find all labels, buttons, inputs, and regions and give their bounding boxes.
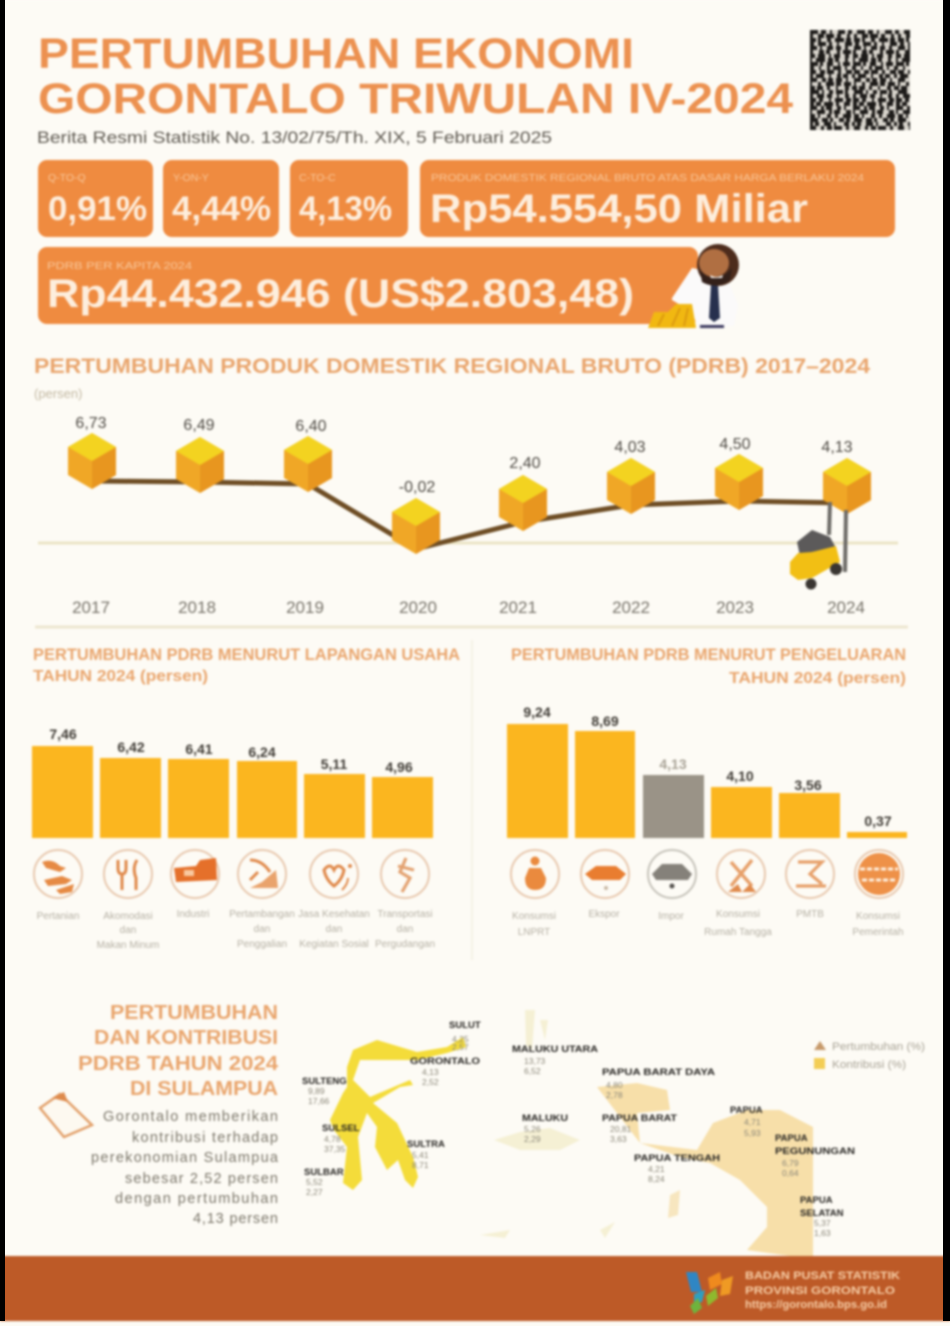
map labels: Maluku and Papua: 6,79 (782, 1158, 799, 1168)
icon: pertambangan (238, 850, 286, 898)
heading: growth by expenditure (511, 646, 906, 687)
icon: jasa lainnya (381, 850, 429, 898)
heading: growth by expenditure: TAHUN 2024 (persen) (729, 670, 906, 687)
line chart: PDRB growth 2017-2024: 4,50 (719, 436, 751, 453)
icon labels: industry: Industri (177, 909, 209, 920)
stat card: PDRB per kapita (38, 247, 698, 324)
heading: Sulampua: DI SULAMPUA (130, 1078, 278, 1100)
map labels: Maluku and Papua: SELATAN (800, 1208, 844, 1219)
text: Sulampua summary: kontribusi terhadap (132, 1130, 278, 1146)
icon labels: industry: Kegiatan Sosial (299, 939, 369, 950)
icon: ekspor (581, 850, 629, 898)
map labels: Maluku and Papua: 13,73 (524, 1056, 546, 1066)
icon labels: industry: dan (120, 925, 136, 936)
icon: pertanian (34, 850, 82, 898)
line chart: PDRB growth 2017-2024: 2022 (612, 598, 650, 617)
map labels: Maluku and Papua: 20,81 (610, 1124, 632, 1134)
text: Sulampua summary: 4,13 persen (193, 1211, 278, 1227)
heading: growth by expenditure: PERTUMBUHAN PDRB MENURUT PENGELUARAN (511, 646, 906, 664)
map labels: Sulawesi: 4,13 (422, 1067, 439, 1077)
icon labels: expenditure: PMTB (796, 909, 824, 920)
heading: Sulampua: PDRB TAHUN 2024 (78, 1053, 279, 1075)
map labels: Sulawesi: 9,89 (308, 1086, 325, 1096)
map labels: Maluku and Papua: 5,26 (524, 1124, 541, 1134)
icon labels: expenditure: Rumah Tangga (704, 927, 772, 938)
line chart: PDRB growth 2017-2024: 2018 (178, 598, 216, 617)
map labels: Sulawesi: 2,52 (422, 1077, 439, 1087)
map labels: Sulawesi: 5,41 (412, 1150, 429, 1160)
stat card: Y-on-Y: Y-ON-Y (173, 172, 209, 184)
map labels: Sulawesi: 4,78 (324, 1134, 341, 1144)
title (38, 30, 793, 123)
footer text: https://gorontalo.bps.go.id (745, 1299, 887, 1311)
icon labels: expenditure: Pemerintah (852, 927, 904, 938)
icon: forklift (790, 502, 846, 590)
map labels: Sulawesi: SULBAR (304, 1167, 344, 1178)
map labels: Sulawesi (302, 1020, 481, 1197)
icon labels: industry: Akomodasi (103, 911, 153, 922)
bar chart: industry: 6,41 (185, 741, 213, 757)
icon labels: expenditure: LNPRT (518, 927, 550, 938)
bar chart: expenditure: 8,69 (591, 713, 619, 729)
bar chart: industry: 4,96 (385, 759, 413, 775)
line chart: PDRB growth 2017-2024: 2023 (716, 598, 754, 617)
bar chart: industry: 5,11 (321, 756, 347, 772)
map labels: Sulawesi: 2,27 (306, 1187, 323, 1197)
line chart: PDRB growth 2017-2024: 2020 (399, 598, 437, 617)
line chart: PDRB growth 2017-2024: 6,73 (75, 415, 107, 432)
footer text: PROVINSI GORONTALO (745, 1285, 896, 1297)
icon labels: expenditure: Konsumsi (856, 911, 900, 922)
icon: jasa kesehatan (310, 850, 358, 898)
stat card: PDRB: Rp54.554,50 Miliar (430, 187, 808, 231)
map labels: Maluku and Papua: PAPUA (800, 1195, 833, 1206)
map labels: Maluku and Papua: 1,63 (814, 1228, 831, 1238)
icon labels: industry: Makan Minum (97, 940, 159, 951)
map labels: Maluku and Papua: PAPUA BARAT (602, 1113, 677, 1124)
stat card: Q-to-Q: Q-TO-Q (48, 172, 86, 184)
icon: impor (648, 850, 696, 898)
icon labels: expenditure: Konsumsi (716, 909, 760, 920)
icon labels: industry: dan (254, 924, 270, 935)
QR code (810, 30, 910, 130)
icon labels: industry: Pertambangan (229, 909, 295, 920)
map legend: Kontribusi (%) (832, 1059, 906, 1071)
text: Sulampua summary: Gorontalo memberikan (103, 1109, 278, 1125)
chart heading (34, 355, 870, 401)
line chart: PDRB growth 2017-2024: 6,40 (295, 418, 327, 435)
title: PERTUMBUHAN EKONOMI (38, 30, 634, 78)
map labels: Sulawesi: 5,52 (306, 1177, 323, 1187)
map legend (814, 1041, 925, 1071)
icon labels: industry: Penggalian (237, 939, 287, 950)
heading: growth by industry: TAHUN 2024 (persen) (33, 668, 208, 685)
title: GORONTALO TRIWULAN IV-2024 (38, 75, 793, 123)
line chart: PDRB growth 2017-2024: 2,40 (509, 455, 541, 472)
map labels: Sulawesi: 37,35 (324, 1144, 346, 1154)
text: Sulampua summary (91, 1109, 279, 1227)
map labels: Maluku and Papua: 2,29 (524, 1134, 541, 1144)
icon labels: industry (37, 909, 435, 951)
map labels: Sulawesi: SULTENG (302, 1076, 347, 1087)
line chart: PDRB growth 2017-2024: 4,13 (821, 439, 853, 456)
icon labels: industry: Pertanian (37, 911, 79, 922)
bar chart: industry: 6,24 (248, 744, 276, 760)
map labels: Sulawesi: SULUT (449, 1020, 481, 1031)
line chart: PDRB growth 2017-2024: 4,03 (614, 439, 646, 456)
map labels: Maluku and Papua: 4,21 (648, 1164, 665, 1174)
stat card: Q-to-Q (38, 160, 153, 237)
line chart: PDRB growth 2017-2024: 6,49 (183, 417, 215, 434)
line chart: PDRB growth 2017-2024: 2017 (72, 598, 110, 617)
heading: Sulampua: PERTUMBUHAN (110, 1002, 278, 1024)
line chart: PDRB growth 2017-2024: 2019 (286, 598, 324, 617)
icon labels: expenditure: Konsumsi (512, 911, 556, 922)
illustration: businessman with gold bars (648, 244, 739, 328)
line chart: PDRB growth 2017-2024: 2021 (499, 598, 537, 617)
chart heading: PERTUMBUHAN PRODUK DOMESTIK REGIONAL BRUTO (PDRB) 2017–2024 (34, 355, 870, 378)
icon labels: industry: dan (397, 924, 413, 935)
map labels: Maluku and Papua: 4,80 (606, 1080, 623, 1090)
text: Sulampua summary: perekonomian Sulampua (91, 1150, 279, 1166)
stat card: PDRB per kapita: PDRB PER KAPITA 2024 (47, 260, 192, 272)
heading: Sulampua: DAN KONTRIBUSI (94, 1027, 278, 1049)
stat card: C-to-C: 4,13% (299, 190, 392, 228)
map legend: Pertumbuhan (%) (832, 1041, 925, 1053)
bar chart: industry (32, 726, 433, 838)
icon labels: industry: Pergudangan (375, 939, 435, 950)
stat card: PDRB (420, 160, 895, 237)
map labels: Maluku and Papua: 4,71 (744, 1117, 761, 1127)
footer text: BADAN PUSAT STATISTIK (745, 1270, 900, 1282)
text: Sulampua summary: dengan pertumbuhan (115, 1191, 278, 1207)
icon: industri (171, 850, 219, 898)
stat card: C-to-C (290, 160, 408, 237)
stat card: Y-on-Y (163, 160, 279, 237)
stat card: Y-on-Y: 4,44% (172, 190, 271, 228)
map labels: Maluku and Papua: 2,78 (606, 1090, 623, 1100)
icon: PMTB (786, 850, 834, 898)
bar chart: expenditure: 4,10 (726, 768, 754, 784)
bar chart: expenditure: 9,24 (523, 704, 551, 720)
icon: konsumsi lembaga (511, 850, 559, 898)
heading: growth by industry (33, 646, 460, 685)
subtitle: Berita Resmi Statistik No. 13/02/75/Th. XIX, 5 Februari 2025 (37, 128, 552, 147)
icon labels: expenditure: Ekspor (588, 909, 620, 920)
map labels: Sulawesi: 8,71 (412, 1160, 429, 1170)
map labels: Sulawesi: 4,25 (452, 1034, 469, 1044)
icon labels: expenditure (512, 909, 904, 938)
line chart: PDRB growth 2017-2024 (38, 415, 898, 617)
map labels: Sulawesi: SULSEL (322, 1123, 360, 1134)
map labels: Sulawesi: 17,66 (308, 1096, 330, 1106)
icon: akomodasi (104, 850, 152, 898)
map labels: Sulawesi: GORONTALO (410, 1056, 480, 1067)
map labels: Maluku and Papua: PAPUA TENGAH (634, 1153, 720, 1164)
icon: konsumsi pemerintah (855, 850, 903, 898)
stat card: Q-to-Q: 0,91% (48, 190, 147, 228)
icon labels: expenditure: Impor (658, 911, 684, 922)
bar chart: industry: 7,46 (49, 726, 77, 742)
bar chart: expenditure: 0,37 (864, 813, 892, 829)
chart heading: (persen) (34, 386, 82, 401)
map labels: Maluku and Papua: 6,52 (524, 1066, 541, 1076)
map labels: Maluku and Papua: 3,63 (610, 1134, 627, 1144)
footer band (0, 1256, 950, 1321)
map labels: Maluku and Papua: PEGUNUNGAN (775, 1146, 855, 1157)
icon: konsumsi rumah tangga (717, 850, 765, 898)
map labels: Maluku and Papua: 0,64 (782, 1168, 799, 1178)
map labels: Maluku and Papua: 5,37 (814, 1218, 831, 1228)
stat card: C-to-C: C-TO-C (299, 172, 336, 184)
stat card: PDRB per kapita: Rp44.432.946 (US$2.803,48) (47, 272, 634, 316)
footer text (745, 1270, 900, 1311)
logo: BPS (686, 1272, 733, 1314)
map labels: Maluku and Papua (512, 1044, 855, 1238)
map labels: Maluku and Papua: PAPUA (730, 1105, 763, 1116)
bar chart: expenditure: 3,56 (794, 777, 822, 793)
text: Sulampua summary: sebesar 2,52 persen (125, 1171, 278, 1187)
map labels: Sulawesi: 2,57 (452, 1042, 469, 1052)
icon: clipboard (40, 1092, 92, 1137)
heading: Sulampua (78, 1002, 279, 1100)
line chart: PDRB growth 2017-2024: -0,02 (399, 479, 435, 496)
icon labels: industry: dan (326, 924, 342, 935)
icon labels: industry: Transportasi (377, 909, 433, 920)
map labels: Maluku and Papua: PAPUA BARAT DAYA (602, 1067, 715, 1078)
bar chart: expenditure (507, 704, 907, 838)
map labels: Maluku and Papua: 5,93 (744, 1128, 761, 1138)
bar chart: expenditure: 4,13 (659, 756, 687, 772)
heading: growth by industry: PERTUMBUHAN PDRB MENURUT LAPANGAN USAHA (33, 646, 460, 664)
map labels: Maluku and Papua: MALUKU (522, 1113, 568, 1124)
bar chart: industry: 6,42 (117, 739, 145, 755)
map: Sulampua (330, 1010, 813, 1256)
stat card: PDRB: PRODUK DOMESTIK REGIONAL BRUTO ATAS DASAR HARGA BERLAKU 2024 (431, 172, 864, 184)
map labels: Maluku and Papua: MALUKU UTARA (512, 1044, 598, 1055)
map labels: Maluku and Papua: PAPUA (775, 1133, 808, 1144)
map labels: Sulawesi: SULTRA (407, 1139, 445, 1150)
map labels: Maluku and Papua: 8,24 (648, 1174, 665, 1184)
line chart: PDRB growth 2017-2024: 2024 (827, 598, 865, 617)
icon labels: industry: Jasa Kesehatan (298, 909, 370, 920)
